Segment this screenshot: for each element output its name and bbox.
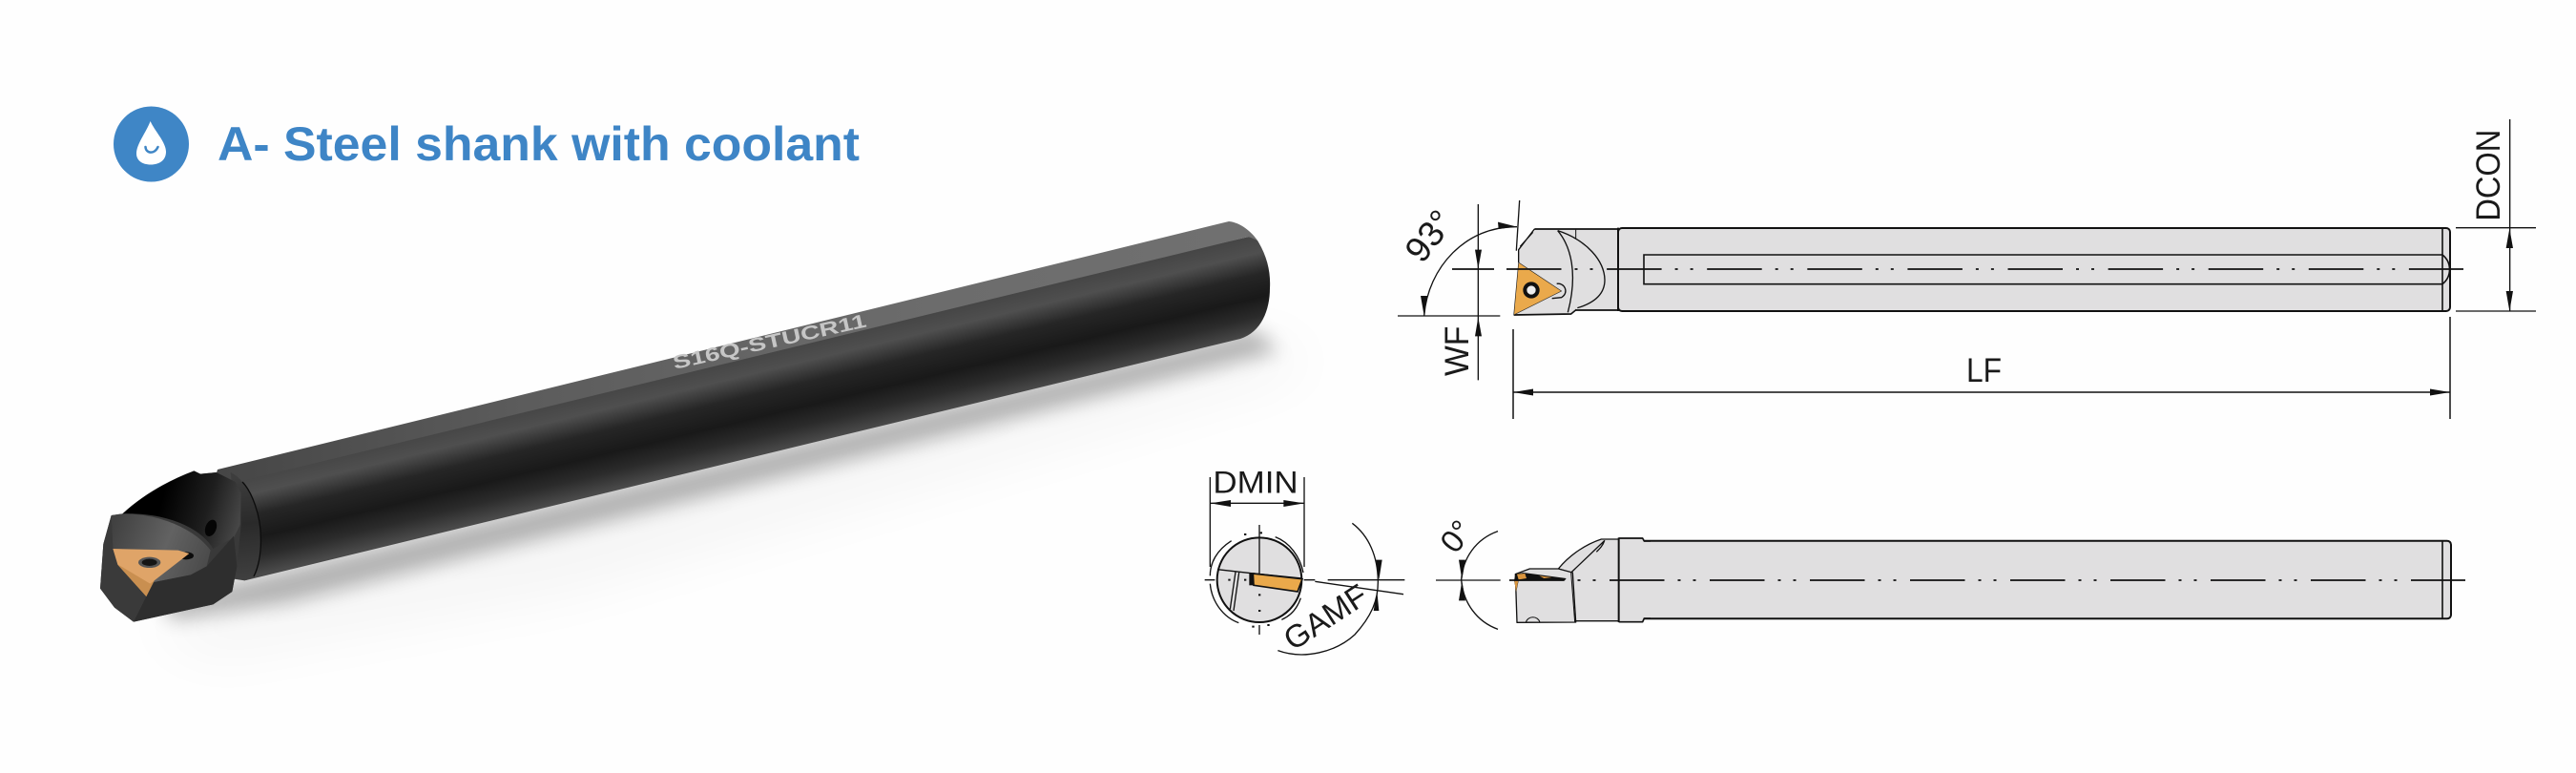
shank body (1618, 228, 2450, 311)
dimension DCON (2456, 119, 2536, 311)
tool head (100, 470, 261, 622)
left side face (100, 515, 146, 622)
collar (231, 472, 261, 580)
dimension 0 degrees: 0° (1434, 514, 1481, 560)
section circle (1217, 537, 1301, 622)
head outline (1514, 228, 1618, 315)
shank round body (224, 237, 1270, 580)
pocket (178, 552, 194, 559)
engraved model text: S16Q-STUCR11 (671, 311, 868, 374)
section centre marks (1205, 525, 1315, 635)
top face (112, 513, 211, 582)
recess (122, 470, 241, 549)
product image: boring bar (100, 221, 1317, 658)
centre line (1506, 268, 2463, 270)
shank body (1618, 541, 2451, 618)
head body (100, 470, 241, 622)
dimension LF (1513, 317, 2450, 419)
outer arcs (1210, 537, 1303, 623)
drawing: end section view (1205, 466, 1404, 658)
coolant hole (203, 518, 218, 538)
dimension 0 degrees (1434, 514, 1501, 629)
dimension GAMF: GAMF (1278, 578, 1374, 658)
carbide insert (113, 549, 189, 596)
dimension WF (1439, 204, 1482, 380)
flat on shank (1644, 255, 2450, 284)
dimension DMIN (1210, 466, 1304, 567)
dimension GAMF (1278, 523, 1404, 658)
insert triangle (1514, 262, 1562, 315)
dimension DMIN: DMIN (1213, 466, 1298, 500)
section dots (1229, 533, 1269, 627)
icon: coolant drop (114, 107, 189, 181)
drawing: top view (1397, 119, 2536, 419)
dimension 93 degrees (1397, 200, 1520, 316)
section lines (1217, 570, 1302, 611)
drawing: side view (1434, 514, 2465, 629)
dimension DCON: DCON (2470, 130, 2507, 221)
section insert (1253, 574, 1302, 592)
floor shadow (143, 329, 1317, 658)
lower side face (134, 536, 237, 622)
shank flat (215, 221, 1257, 481)
insert screw (138, 557, 160, 568)
side head (1514, 537, 1651, 622)
dimension LF: LF (1966, 352, 2002, 389)
dimension 93 degrees: 93° (1397, 202, 1462, 269)
title: A- Steel shank with coolant (218, 117, 860, 171)
dimension WF: WF (1439, 326, 1476, 376)
centre line (1509, 579, 2465, 581)
